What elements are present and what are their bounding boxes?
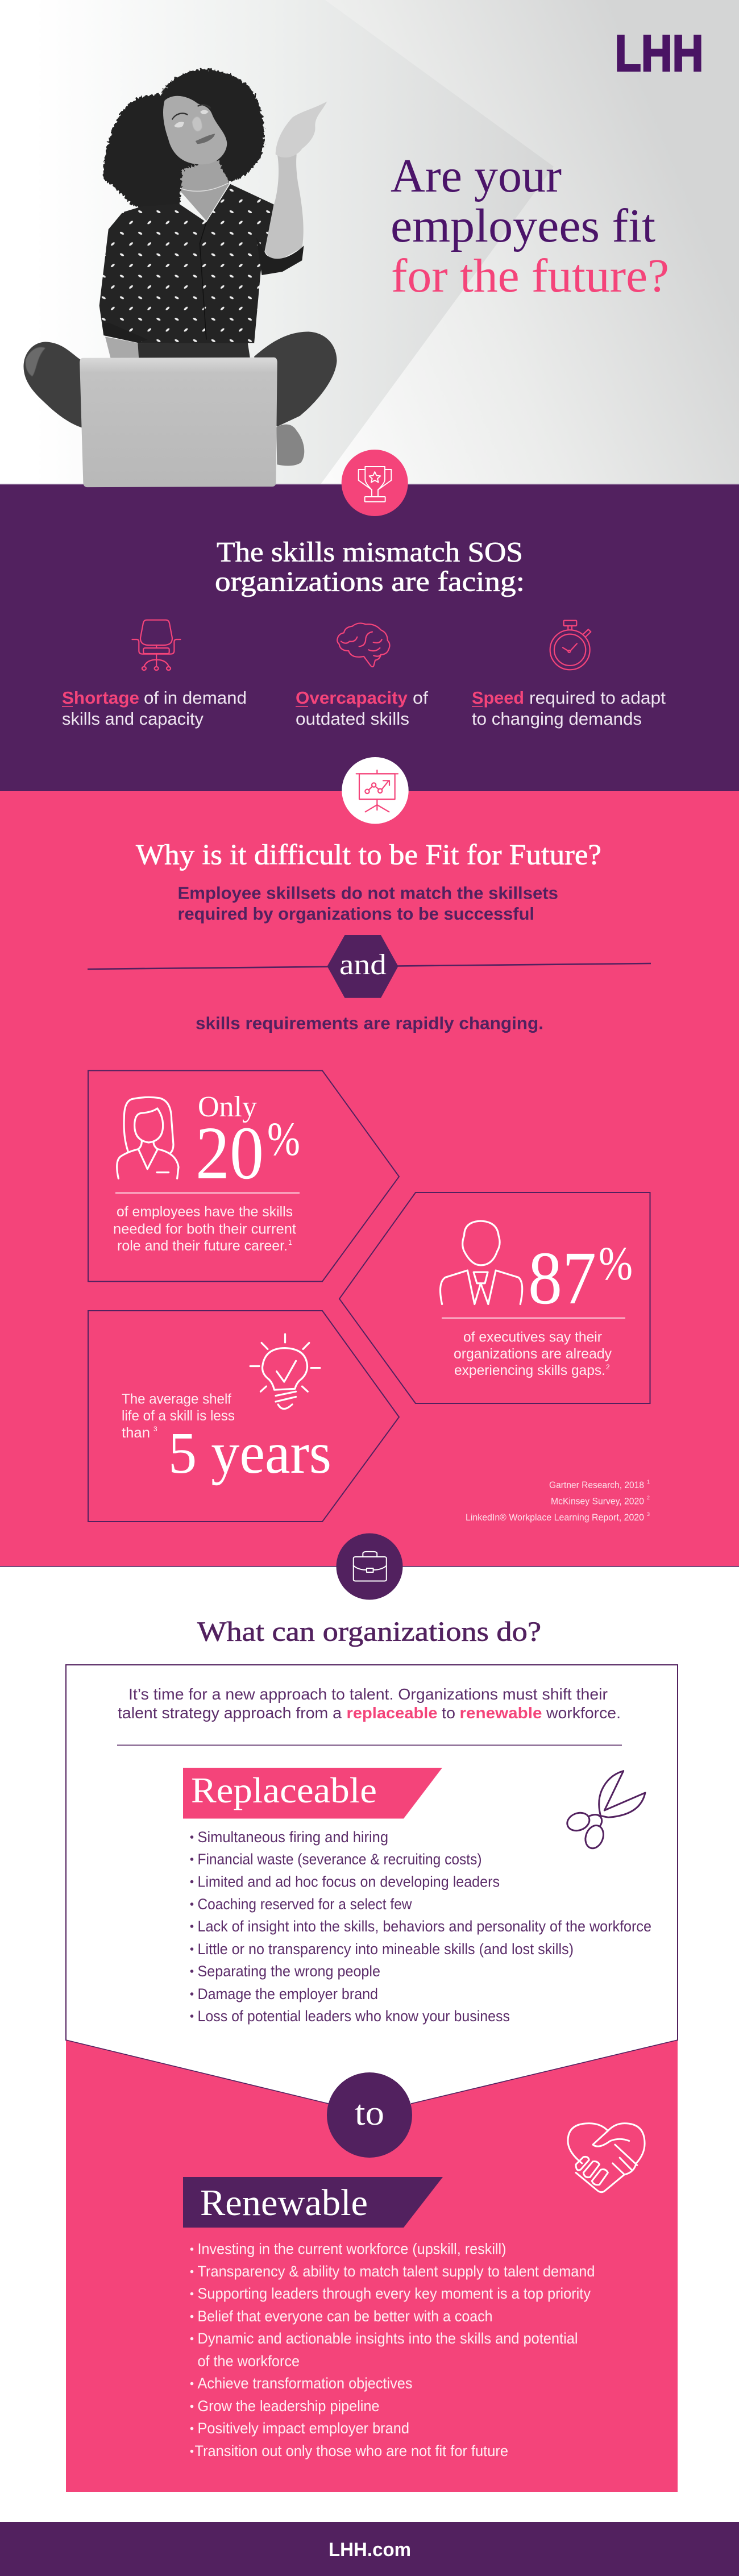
- divider with and hexagon: and: [339, 949, 387, 981]
- text: sources: 1: [647, 1479, 650, 1485]
- panel: hero background: [0, 0, 739, 484]
- text: sources: 3: [647, 1511, 650, 1517]
- panel: pink why difficult section: [0, 791, 739, 1567]
- heading: why difficult: Why is it difficult to be Fit for Future?: [136, 839, 601, 871]
- list: renewable workforce traits: Achieve transformation objectives: [198, 2375, 413, 2392]
- title: for the future?: [391, 250, 669, 302]
- list: renewable workforce traits: Supporting leaders through every key moment is a top priority: [198, 2285, 591, 2302]
- list: renewable workforce traits: Grow the leadership pipeline: [198, 2398, 380, 2415]
- title: Are your: [391, 149, 562, 202]
- jeans: [23, 331, 337, 428]
- icon: stopwatch: [550, 621, 591, 670]
- list: replaceable workforce traits: Limited and ad hoc focus on developing leaders: [198, 1873, 500, 1891]
- text: overcapacity: [296, 688, 428, 729]
- title: [391, 149, 669, 302]
- text: speed: to changing demands: [472, 709, 642, 729]
- heading: what can organizations do: What can organizations do?: [197, 1615, 541, 1647]
- banner: renewable: [183, 2177, 443, 2228]
- panel: five years stat: The average shelf: [122, 1391, 231, 1407]
- necklace: [180, 182, 229, 191]
- list: renewable workforce traits: Transparency & ability to match talent supply to talent demand: [198, 2263, 595, 2280]
- text: sources: LinkedIn® Workplace Learning Report, 2020: [466, 1512, 644, 1523]
- banner: renewable: Renewable: [200, 2182, 368, 2224]
- list: replaceable workforce traits: Damage the employer brand: [198, 1985, 378, 2002]
- list: renewable workforce traits: Dynamic and actionable insights into the skills and potential: [198, 2330, 578, 2347]
- list: replaceable workforce traits: Financial waste (severance & recruiting costs): [198, 1851, 482, 1868]
- text: skills requirements: skills requirements are rapidly changing.: [196, 1013, 543, 1033]
- text: approach intro: It’s time for a new approach to talent. Organizations must shift their: [128, 1685, 608, 1703]
- footer: [0, 2522, 739, 2576]
- heading: skills mismatch: [215, 535, 525, 597]
- icon: trophy circle: [342, 450, 408, 516]
- text: approach intro: renewable: [459, 1704, 542, 1722]
- text: approach intro: replaceable: [347, 1704, 438, 1722]
- list: replaceable workforce traits: Separating the wrong people: [198, 1963, 380, 1980]
- panel: five years stat: life of a skill is less: [122, 1408, 235, 1424]
- panel: 20 percent stat: 1: [288, 1239, 292, 1247]
- text: approach intro: workforce.: [546, 1704, 621, 1722]
- panel: five years stat: than: [122, 1425, 150, 1441]
- heading: skills mismatch: The skills mismatch SOS: [217, 535, 523, 567]
- list: replaceable workforce traits: Lack of insight into the skills, behaviors and personality of the workforce: [198, 1918, 651, 1935]
- text: sources: [466, 1479, 650, 1523]
- panel: 20 percent stat: needed for both their current: [113, 1221, 296, 1237]
- list: renewable workforce traits: Transition out only those who are not fit for future: [194, 2442, 508, 2459]
- text: speed: Speed: [472, 688, 524, 708]
- text: sources: 2: [647, 1495, 650, 1501]
- text: overcapacity: of: [413, 688, 428, 708]
- text: approach intro: talent strategy approach from a: [118, 1704, 342, 1722]
- badge: to: to: [355, 2094, 384, 2133]
- panel: 87 percent stat: organizations are already: [454, 1346, 612, 1362]
- text: speed: [472, 688, 666, 729]
- panel: 87 percent stat: [339, 1193, 650, 1403]
- text: overcapacity: outdated skills: [296, 709, 409, 729]
- panel: five years stat: 5 years: [168, 1420, 331, 1486]
- list: replaceable workforce traits: [190, 1829, 651, 2025]
- panel: 20 percent stat: [88, 1071, 399, 1281]
- banner: replaceable: Replaceable: [191, 1770, 377, 1810]
- banner: replaceable: [183, 1768, 442, 1819]
- icon: briefcase circle: [337, 1534, 402, 1599]
- text: shortage: skills and capacity: [62, 709, 204, 729]
- panel: 87 percent stat: 87: [528, 1236, 596, 1320]
- panel: 20 percent stat: role and their future career.: [117, 1238, 288, 1254]
- shoe: [276, 425, 304, 466]
- list: replaceable workforce traits: Coaching reserved for a select few: [198, 1896, 412, 1913]
- text: shortage: Shortage: [62, 688, 139, 708]
- list: replaceable workforce traits: Little or no transparency into mineable skills (and lost skills): [198, 1941, 574, 1958]
- panel: 87 percent stat: 2: [606, 1363, 610, 1371]
- text: approach intro: to: [442, 1704, 455, 1722]
- badge: to: [327, 2072, 412, 2158]
- panel: five years stat: 3: [153, 1425, 157, 1433]
- logo: LHH: LHH: [615, 25, 704, 82]
- text: shortage: [62, 688, 247, 729]
- list: replaceable workforce traits: Simultaneous firing and hiring: [198, 1829, 388, 1846]
- text: shortage: of in demand: [144, 688, 247, 708]
- text: skillsets statement: required by organizations to be successful: [177, 904, 534, 924]
- left forearm: [105, 336, 139, 360]
- list: renewable workforce traits: Investing in the current workforce (upskill, reskill): [198, 2241, 506, 2258]
- icon: businessman: [441, 1221, 522, 1304]
- icon: scissors: [564, 1771, 645, 1851]
- raised arm: [265, 153, 304, 263]
- icon: businesswoman: [117, 1097, 178, 1178]
- icon: presentation board circle: [342, 757, 409, 824]
- list: renewable workforce traits: of the workforce: [198, 2353, 300, 2370]
- panel: 20 percent stat: 20: [196, 1111, 264, 1195]
- panel: 20 percent stat: %: [267, 1113, 300, 1166]
- face: [163, 96, 227, 164]
- icon: office chair: [132, 620, 180, 670]
- list: renewable workforce traits: [190, 2241, 595, 2459]
- photo: woman sitting with laptop: [23, 69, 337, 487]
- text: overcapacity: Overcapacity: [296, 688, 408, 708]
- icon: handshake heart: [568, 2124, 645, 2192]
- panel: 87 percent stat: of executives say their: [463, 1329, 602, 1345]
- laptop: [80, 358, 277, 487]
- panel: 87 percent stat: experiencing skills gaps.: [454, 1362, 605, 1378]
- panel: 87 percent stat: %: [599, 1237, 633, 1290]
- hair: [102, 69, 264, 211]
- list: renewable workforce traits: Positively impact employer brand: [198, 2420, 409, 2437]
- text: sources: Gartner Research, 2018: [549, 1480, 644, 1490]
- panel: 20 percent stat: Only: [198, 1091, 257, 1123]
- panel: white what can organizations do section: [0, 1566, 739, 2522]
- icon: brain: [337, 623, 389, 667]
- text: speed: required to adapt: [529, 688, 666, 708]
- shirt: [99, 184, 274, 343]
- text: sources: McKinsey Survey, 2020: [551, 1496, 644, 1506]
- list: renewable workforce traits: Belief that everyone can be better with a coach: [198, 2308, 492, 2325]
- heading: skills mismatch: organizations are facing:: [215, 565, 525, 597]
- text: skillsets statement: [177, 883, 558, 924]
- neck: [179, 156, 229, 221]
- text: approach intro: [117, 1685, 622, 1746]
- list: replaceable workforce traits: Loss of potential leaders who know your business: [198, 2008, 510, 2025]
- panel: 20 percent stat: of employees have the skills: [117, 1204, 293, 1220]
- panel: replaceable to renewable box: [66, 1665, 678, 2492]
- panel: purple skills mismatch section: [0, 484, 739, 791]
- icon: light bulb: [250, 1334, 320, 1409]
- divider with and hexagon: [88, 935, 651, 998]
- panel: five years stat: [88, 1311, 399, 1522]
- text: skillsets statement: Employee skillsets do not match the skillsets: [177, 883, 558, 903]
- footer: LHH.com: [329, 2539, 411, 2561]
- title: employees fit: [391, 200, 655, 252]
